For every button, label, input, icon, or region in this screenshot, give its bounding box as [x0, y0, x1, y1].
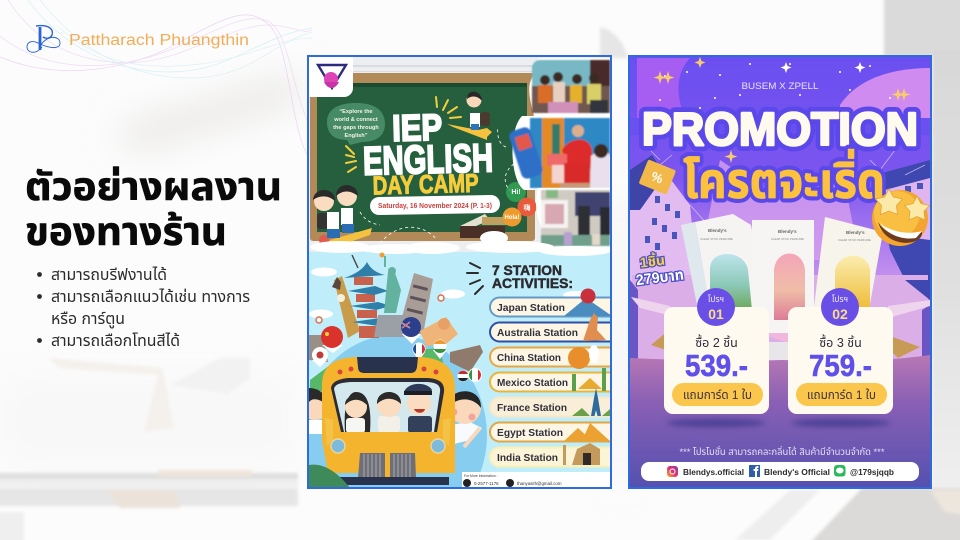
promo card 2 [788, 288, 893, 414]
logo: Pattharach Phuangthin [27, 26, 249, 52]
box 2: CLEAR STICK PERFUME [771, 237, 804, 241]
social media bar: @179sjqqb [850, 467, 894, 477]
China Station [490, 345, 620, 369]
yellow school bus [309, 357, 455, 488]
bottom right diagonal [808, 488, 960, 540]
subtitle: BUSEM X ZPELL [742, 81, 818, 92]
Mexico Station: Mexico Station [497, 377, 568, 389]
social media bar: Blendys.official [683, 467, 744, 477]
bullet list: หรือ การ์ตูน [51, 311, 125, 328]
two kids on pencil [313, 185, 372, 248]
flag pins [312, 295, 482, 382]
Australia Station [490, 313, 620, 342]
quote bubble: “Explore the [339, 109, 373, 115]
quote bubble [327, 103, 385, 145]
promo card 1: แถมการ์ด 1 ใบ [683, 388, 752, 402]
Egypt Station: Egypt Station [497, 427, 563, 439]
title: Thai slogan: โครตจะเริ่ด [683, 149, 885, 209]
quote bubble: world & connect [333, 117, 378, 123]
dashed paths [360, 129, 514, 243]
date pill [370, 195, 500, 215]
city buildings [630, 155, 930, 310]
speech bubbles: 嗨 [524, 203, 530, 212]
promo card 2: ซื้อ 3 ชิ้น [819, 334, 862, 350]
contact strip: For More Information : [464, 474, 498, 478]
decorative wave lines [0, 0, 312, 160]
box 3 [813, 217, 883, 315]
contact strip: thanyasith@gmail.com [517, 481, 562, 486]
Mexico Station [490, 368, 620, 392]
pisa tower [402, 273, 433, 334]
Japan Station [490, 288, 620, 316]
icon: facebook [749, 465, 760, 477]
emoji: star struck [872, 189, 930, 246]
mexican pyramid [450, 345, 483, 372]
Australia Station: Australia Station [497, 327, 578, 339]
China Station: China Station [497, 352, 561, 364]
quote bubble: English” [344, 133, 368, 139]
heading: 7 station activities [467, 262, 573, 294]
bullet list: สามารถเลือกโทนสีได้ [51, 333, 180, 350]
promo card 1: 01 [708, 306, 724, 322]
fireworks and ticket: % [649, 168, 666, 187]
heading: ของทางร้าน [25, 211, 227, 254]
left desk strip [0, 473, 298, 479]
icon: line [834, 465, 846, 476]
title: IEP English Day Camp: IEP [392, 107, 443, 149]
bus front [346, 432, 432, 433]
stars [654, 57, 910, 163]
big ben [334, 276, 360, 338]
floor [630, 342, 930, 488]
taj mahal [420, 317, 458, 346]
title: IEP English Day Camp: DAY CAMP [372, 168, 479, 201]
school logo [309, 57, 353, 97]
photo 3 [536, 188, 612, 252]
box 2: Blendy's [778, 229, 797, 234]
clouds [309, 231, 611, 318]
icon: instagram [667, 466, 678, 477]
logo name: Pattharach Phuangthin [69, 32, 249, 49]
chalk and eraser [460, 214, 488, 226]
bullet list [37, 267, 250, 350]
box 1 [681, 214, 768, 320]
faint stand shapes [48, 358, 174, 432]
disclaimer: *** โปรโมชั่น สามารถคละกลิ่นได้ สินค้ามีจำนวนจำกัด *** [680, 446, 885, 458]
heading [25, 166, 282, 254]
India Station: India Station [497, 452, 558, 464]
poster background [630, 57, 930, 487]
title: IEP English Day Camp [364, 114, 492, 195]
date pill: Saturday, 16 November 2024 (P. 1-3) [378, 203, 492, 210]
gift box flaps [631, 297, 930, 358]
France Station: France Station [497, 402, 567, 414]
speech bubbles: Hola! [504, 215, 520, 221]
box 2 [752, 220, 814, 333]
heading: ตัวอย่างผลงาน [25, 166, 282, 209]
price burst: 1 piece 279 baht: 1ชิ้น [639, 251, 666, 271]
bullet list: สามารถบรีฟงานได้ [51, 267, 167, 284]
photo 1 [529, 58, 612, 116]
France Station [490, 388, 620, 416]
globe [309, 337, 487, 487]
price burst: 1 piece 279 baht: 279บาท [635, 266, 685, 289]
social media bar: Blendy's Official [764, 467, 830, 477]
promo card 1: 539.- [685, 348, 748, 383]
top right block [884, 0, 960, 56]
promo card 2: 02 [832, 306, 848, 322]
box 1: CLEAR STICK PERFUME [700, 237, 733, 241]
yellow sparks [346, 97, 461, 172]
promo card 1: ซื้อ 2 ชิ้น [695, 334, 738, 350]
box 3: Blendy's [846, 230, 865, 235]
title: Thai slogan: โครตจะเริ่ด [683, 149, 885, 209]
quote bubble: the gaps through [333, 125, 379, 131]
bullet list: สามารถเลือกแนวได้เช่น ทางการ [51, 288, 250, 306]
promo card 1: โปรฯ [708, 294, 724, 304]
promo card 2: โปรฯ [832, 294, 848, 304]
Japan Station: Japan Station [497, 302, 565, 314]
photo 2 [508, 116, 612, 190]
title: PROMOTION: PROMOTION [642, 103, 918, 155]
statue of liberty [384, 272, 401, 313]
price burst: 1 piece 279 baht [633, 248, 685, 289]
India Station [490, 443, 620, 466]
poster top wall [309, 57, 610, 257]
heading: 7 station activities: 7 STATION [492, 262, 562, 278]
title: IEP English Day Camp: ENGLISH [362, 136, 494, 184]
title: PROMOTION: PROMOTION [642, 103, 918, 155]
promo card 2: แถมการ์ด 1 ใบ [807, 388, 876, 402]
fireworks and ticket [639, 145, 925, 225]
chalkboard [310, 73, 535, 241]
panel: Promotion poster [628, 55, 932, 489]
boy on pencil [447, 92, 492, 140]
contact strip [462, 472, 610, 488]
perfume boxes [681, 214, 883, 333]
kids in windscreen [345, 384, 432, 433]
box 3: CLEAR STICK PERFUME [838, 238, 871, 242]
gift box back [630, 275, 930, 360]
Egypt Station [490, 422, 620, 442]
contact strip: 0-2577-1176 [474, 481, 499, 486]
heading: 7 station activities: ACTIVITIES: [492, 275, 573, 291]
promo card 1 [664, 288, 769, 414]
sky panel [309, 252, 610, 488]
speech bubbles [502, 182, 536, 226]
side kids [300, 388, 482, 447]
box 1: Blendy's [708, 228, 727, 233]
panel: IEP English Day Camp poster [307, 55, 612, 489]
icon: P monogram [27, 26, 60, 52]
speech bubbles: Hi! [511, 189, 521, 196]
pagoda [354, 277, 379, 338]
landmarks [309, 252, 487, 487]
social media bar [641, 462, 919, 481]
station list [490, 288, 620, 466]
promo card 2: 759.- [809, 348, 872, 383]
